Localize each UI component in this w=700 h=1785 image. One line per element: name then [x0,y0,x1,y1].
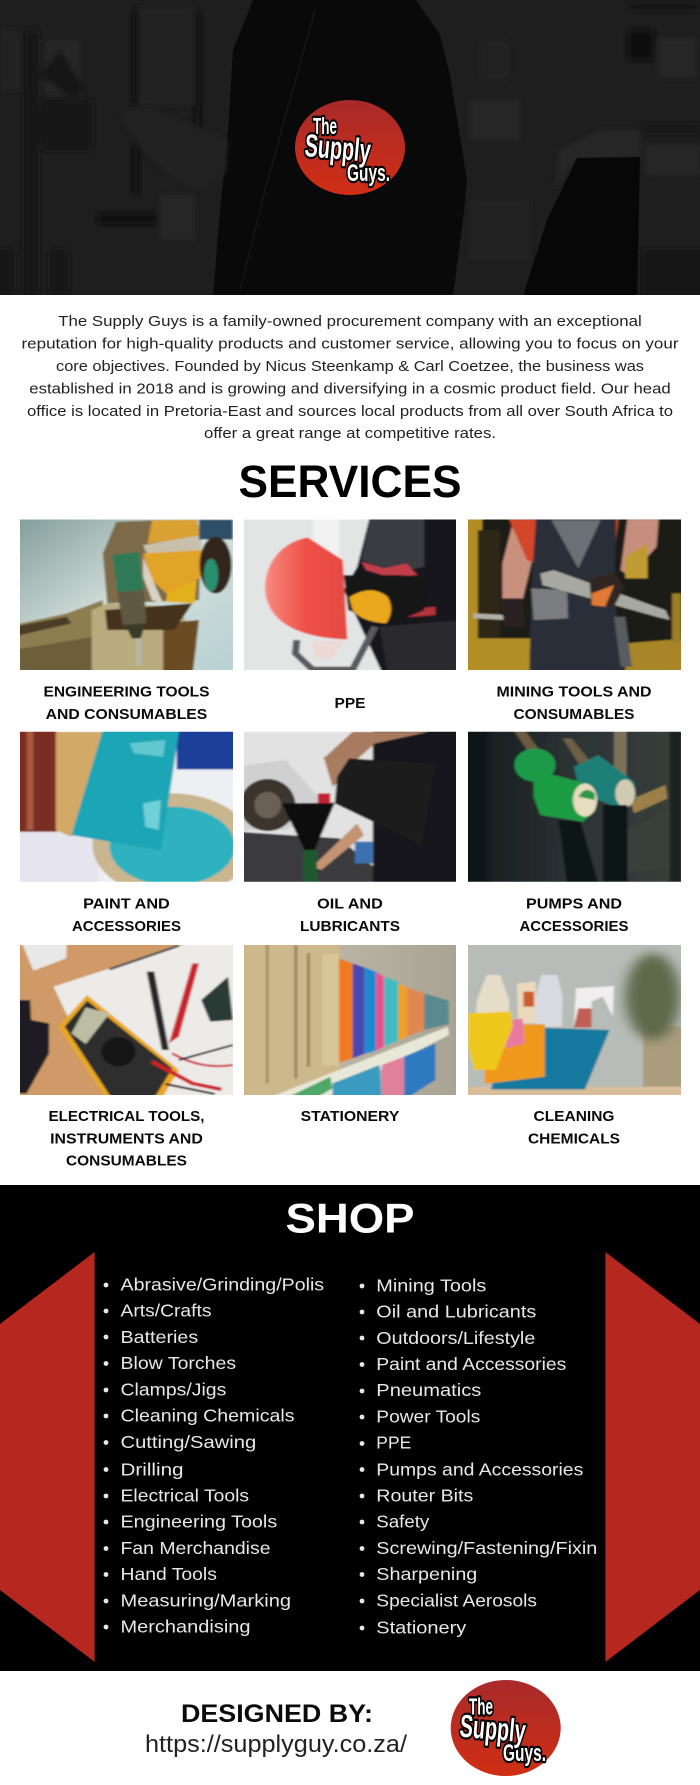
caption: row 1: PPE [334,695,366,712]
list: shop categories right: Screwing/Fastening/Fixin [376,1538,597,1558]
list: shop categories left: Drilling [120,1459,184,1479]
list: shop categories left: Cutting/Sawing [120,1432,256,1452]
hero banner photo [0,0,700,295]
photo: mining tools [468,520,681,670]
caption: row 2: PUMPS AND [526,896,622,912]
list: shop categories left: Electrical Tools [120,1486,249,1506]
photo: engineering tools [20,520,233,670]
logo: footer: The [469,1694,493,1720]
caption: row 2: ACCESSORIES [72,918,181,935]
list: shop categories right: Stationery [376,1617,467,1637]
footer: designed by: DESIGNED BY: [181,1700,373,1728]
list: shop categories left [104,1274,324,1637]
list: shop categories left: Fan Merchandise [120,1538,270,1558]
list: shop categories right: Router Bits [376,1486,474,1506]
caption: row 2: LUBRICANTS [300,918,400,935]
photo: PPE [244,520,456,670]
caption: row 3: CONSUMABLES [66,1152,187,1170]
logo: top: Guys. [347,160,390,187]
caption: row 3: ELECTRICAL TOOLS, [48,1108,204,1125]
list: shop categories right: PPE [376,1433,411,1453]
list: shop categories left: Merchandising [120,1617,250,1637]
intro paragraph: The Supply Guys is a family-owned procurement company with an exceptional [58,313,642,330]
list: shop categories right: Sharpening [376,1564,477,1584]
caption: row 1: AND CONSUMABLES [46,706,207,723]
caption: row 1: MINING TOOLS AND [496,684,652,700]
list: shop categories right: Paint and Accessories [376,1354,567,1374]
arm holding bottle [118,108,227,192]
logo: footer: Supply [458,1708,527,1749]
list: shop categories left: Blow Torches [120,1353,236,1373]
list: shop categories right: Pneumatics [376,1380,482,1400]
footer: designed by: https://supplyguy.co.za/ [145,1731,407,1758]
logo: top [295,100,405,195]
intro paragraph: reputation for high-quality products and customer service, allowing you to focus on your [22,336,678,352]
photo: cleaning chemicals [468,945,681,1095]
intro paragraph: offer a great range at competitive rates. [204,425,496,442]
caption: row 2: PAINT AND [83,896,170,912]
intro paragraph: established in 2018 and is growing and diversifying in a cosmic product field. Our head [29,380,671,398]
caption: row 1 [44,684,652,723]
list: shop categories left: Hand Tools [120,1564,217,1584]
list: shop categories right: Mining Tools [376,1275,487,1295]
list: shop categories right: Oil and Lubricants [376,1302,537,1322]
footer: designed by [145,1700,407,1758]
person silhouette [213,0,467,296]
caption: row 3: CLEANING [534,1108,614,1125]
list: shop categories right [360,1275,597,1637]
list: shop categories left: Arts/Crafts [120,1301,212,1321]
dark figure right [523,157,640,296]
panel: shop [0,1185,700,1671]
logo: footer [451,1680,561,1776]
logo: footer: Guys. [503,1740,546,1767]
intro paragraph: office is located in Pretoria-East and sources local products from all over South Africa to [27,403,673,420]
list: shop categories left: Measuring/Marking [120,1590,291,1610]
logo: top: Supply [303,127,372,169]
photo: electrical [20,945,233,1095]
caption: row 1: ENGINEERING TOOLS [44,684,210,700]
caption: row 2: OIL AND [317,896,383,912]
list: shop categories right: Power Tools [376,1406,481,1426]
red shape left [0,1252,95,1662]
list: shop categories left: Batteries [120,1327,198,1347]
caption: row 1: CONSUMABLES [514,706,634,723]
intro paragraph [22,313,678,442]
caption: row 3: CHEMICALS [528,1130,620,1148]
logo: top: The [313,113,337,139]
caption: row 2 [72,896,628,935]
list: shop categories right: Specialist Aerosols [376,1590,537,1610]
list: shop categories right: Pumps and Accessories [376,1459,584,1479]
list: shop categories right: Safety [376,1512,430,1532]
list: shop categories left: Clamps/Jigs [120,1379,227,1399]
red shape right [605,1252,700,1662]
photo: pumps [468,732,681,882]
intro paragraph: core objectives. Founded by Nicus Steenkamp & Carl Coetzee, the business was [56,358,644,375]
heading: shop: SHOP [286,1194,414,1242]
list: shop categories left: Engineering Tools [120,1512,277,1532]
list: shop categories right: Outdoors/Lifestyle [376,1328,535,1348]
caption: row 2: ACCESSORIES [520,918,628,935]
list: shop categories left: Abrasive/Grinding/Polis [120,1274,324,1294]
heading: services: SERVICES [238,456,462,507]
list: shop categories left: Cleaning Chemicals [120,1406,295,1426]
photo: oil [244,732,456,882]
caption: row 3: STATIONERY [301,1108,399,1125]
photo: stationery [244,945,456,1095]
jacket zip [240,10,315,290]
caption: row 3: INSTRUMENTS AND [50,1130,203,1148]
caption: row 3 [48,1108,620,1170]
photo: paint [20,732,233,882]
